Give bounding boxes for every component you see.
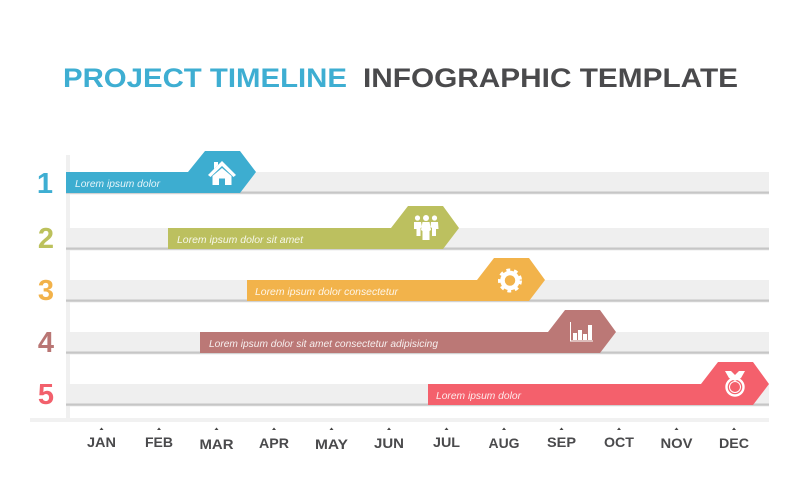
row 3 number: 3 bbox=[38, 275, 54, 307]
month labels: APR bbox=[259, 435, 289, 451]
month labels: MAR bbox=[200, 436, 234, 452]
title: project timeline: PROJECT TIMELINE bbox=[63, 63, 347, 93]
row 5 track bbox=[66, 384, 769, 406]
month labels: JUN bbox=[374, 435, 404, 451]
month labels: JUL bbox=[433, 434, 460, 450]
month labels: JAN bbox=[87, 434, 116, 450]
row 5 number: 5 bbox=[38, 379, 54, 411]
row 5 label: Lorem ipsum dolor bbox=[436, 390, 521, 402]
month labels: SEP bbox=[547, 434, 576, 450]
icon: bar chart bbox=[570, 322, 593, 342]
month labels: OCT bbox=[604, 434, 634, 450]
row 1 number: 1 bbox=[37, 168, 53, 200]
month labels: NOV bbox=[660, 435, 693, 451]
icon: gear bbox=[500, 270, 520, 291]
icon: medal bbox=[725, 371, 745, 396]
axis ticks bbox=[100, 428, 736, 430]
row 3 label: Lorem ipsum dolor consectetur bbox=[255, 286, 398, 298]
row 4 number: 4 bbox=[38, 327, 54, 359]
month labels: AUG bbox=[488, 435, 520, 451]
row 2 label: Lorem ipsum dolor sit amet bbox=[177, 234, 304, 246]
month axis bbox=[87, 428, 749, 452]
month labels: FEB bbox=[145, 434, 173, 450]
row 2 bbox=[38, 206, 769, 255]
row 5 bbox=[38, 362, 769, 411]
row 4 label: Lorem ipsum dolor sit amet consectetur adipisicing bbox=[209, 338, 438, 350]
title bbox=[63, 63, 738, 93]
row 1 track bbox=[66, 172, 769, 194]
month labels: MAY bbox=[315, 436, 349, 452]
row 3 track bbox=[66, 280, 769, 302]
month labels bbox=[87, 434, 749, 452]
row 2 number: 2 bbox=[38, 223, 54, 255]
row 5 bar bbox=[428, 362, 769, 405]
title: infographic template: INFOGRAPHIC TEMPLATE bbox=[363, 63, 738, 93]
row 3 bar bbox=[247, 258, 545, 301]
row 2 track bbox=[66, 228, 769, 250]
row 1 bbox=[37, 151, 769, 200]
row 4 bbox=[38, 310, 769, 359]
icon: people bbox=[414, 215, 438, 240]
row 4 track bbox=[66, 332, 769, 354]
row 3 bbox=[38, 258, 769, 307]
month labels: DEC bbox=[719, 435, 749, 451]
row 1 bar bbox=[66, 151, 256, 193]
row 4 bar bbox=[200, 310, 616, 353]
row 1 label: Lorem ipsum dolor bbox=[75, 178, 160, 190]
icon: house bbox=[208, 161, 236, 185]
row 2 bar bbox=[168, 206, 459, 249]
